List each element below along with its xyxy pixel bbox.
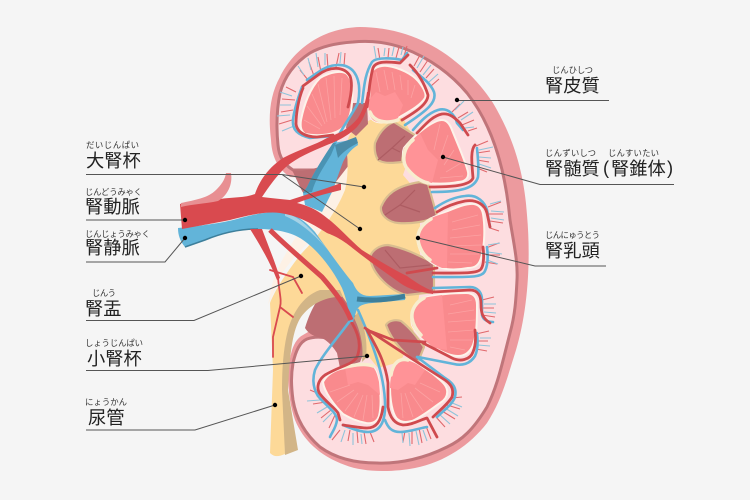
hilum pale tissue	[268, 165, 350, 305]
label: 小腎杯: 小腎杯	[87, 348, 142, 369]
renal pelvis and calyces	[270, 118, 420, 456]
pyramid 6	[323, 364, 380, 423]
renal cortex	[277, 41, 517, 463]
label: 腎乳頭: 腎乳頭	[545, 240, 600, 261]
label: 腎動脈: じんどうみゃく	[85, 187, 142, 197]
label: 腎静脈	[85, 229, 187, 262]
hilum shadow upper	[292, 152, 350, 196]
label: 腎動脈: 腎動脈	[85, 196, 140, 217]
pyramid 4	[418, 204, 484, 270]
pyramid 5	[411, 293, 477, 356]
label: 尿管: にょうかん	[85, 397, 127, 407]
label: 腎髄質 (腎錐体): (	[603, 157, 609, 178]
label: 大腎杯	[86, 140, 366, 231]
label: 尿管: 尿管	[88, 407, 125, 428]
label: 腎静脈: 腎静脈	[85, 237, 140, 258]
pyramid 1	[301, 72, 352, 135]
pyramid 3	[403, 120, 468, 184]
label: 腎盂: じんう	[92, 288, 116, 298]
artery pelvis trunk	[250, 229, 280, 280]
pyramid 7	[390, 360, 447, 422]
label: 大腎杯: だいじんぱい	[86, 140, 139, 150]
renal vein lower edge	[185, 229, 258, 247]
pyramid 2	[368, 66, 426, 122]
label: 腎静脈: じんじょうみゃく	[85, 229, 150, 239]
label: 尿管	[85, 397, 277, 430]
renal sinus 5	[386, 320, 424, 362]
label: 大腎杯: 大腎杯	[86, 150, 141, 171]
vein loops around pyramids	[293, 53, 493, 437]
label: 腎髄質 (腎錐体)	[441, 148, 674, 184]
renal sinus 4	[370, 245, 434, 295]
renal sinus 2	[375, 122, 418, 163]
renal vein	[178, 212, 405, 322]
label: 腎皮質	[455, 65, 609, 102]
label: 腎髄質 (腎錐体): じんすいたい	[608, 148, 659, 158]
renal artery	[180, 92, 433, 294]
label: 腎皮質: じんひしつ	[552, 65, 593, 75]
renal vein upper cap shade	[335, 137, 358, 158]
label: 小腎杯: しょうじんぱい	[85, 338, 143, 348]
label: 腎髄質 (腎錐体): 腎錐体	[611, 158, 666, 179]
label: 腎皮質: 腎皮質	[545, 75, 600, 96]
label: 小腎杯	[85, 338, 369, 370]
label: 腎乳頭: じんにゅうとう	[545, 230, 600, 240]
lower calyx wall	[354, 312, 367, 362]
capillaries red	[279, 46, 503, 444]
renal vein dark branch	[357, 296, 405, 300]
renal sinus 1	[346, 103, 368, 136]
kidney illustration	[178, 27, 529, 471]
label: 腎動脈	[85, 187, 187, 222]
label: 腎髄質 (腎錐体): 腎髄質	[545, 158, 600, 179]
artery descending branch	[270, 230, 351, 320]
artery small upper branch	[181, 173, 231, 207]
label: 腎盂: 腎盂	[85, 298, 122, 319]
kidney capsule	[270, 27, 529, 471]
renal sinus 3	[381, 182, 437, 223]
label: 腎髄質 (腎錐体): )	[667, 157, 673, 178]
artery branches in pelvis	[270, 270, 302, 357]
label: 腎乳頭	[416, 230, 606, 266]
hilum shadow lower	[305, 290, 368, 368]
sinus vessels	[378, 136, 430, 268]
renal vein upper thin branch	[335, 103, 358, 143]
ureter wall	[282, 290, 343, 455]
label: 腎盂	[85, 274, 303, 320]
label: 腎髄質 (腎錐体): じんずいしつ	[545, 148, 596, 158]
renal vein highlight	[285, 213, 328, 250]
renal vein upper branch	[303, 139, 358, 212]
artery loops around pyramids	[296, 55, 490, 437]
renal vein upper branch shade	[303, 143, 336, 193]
capillaries blue	[277, 46, 504, 446]
